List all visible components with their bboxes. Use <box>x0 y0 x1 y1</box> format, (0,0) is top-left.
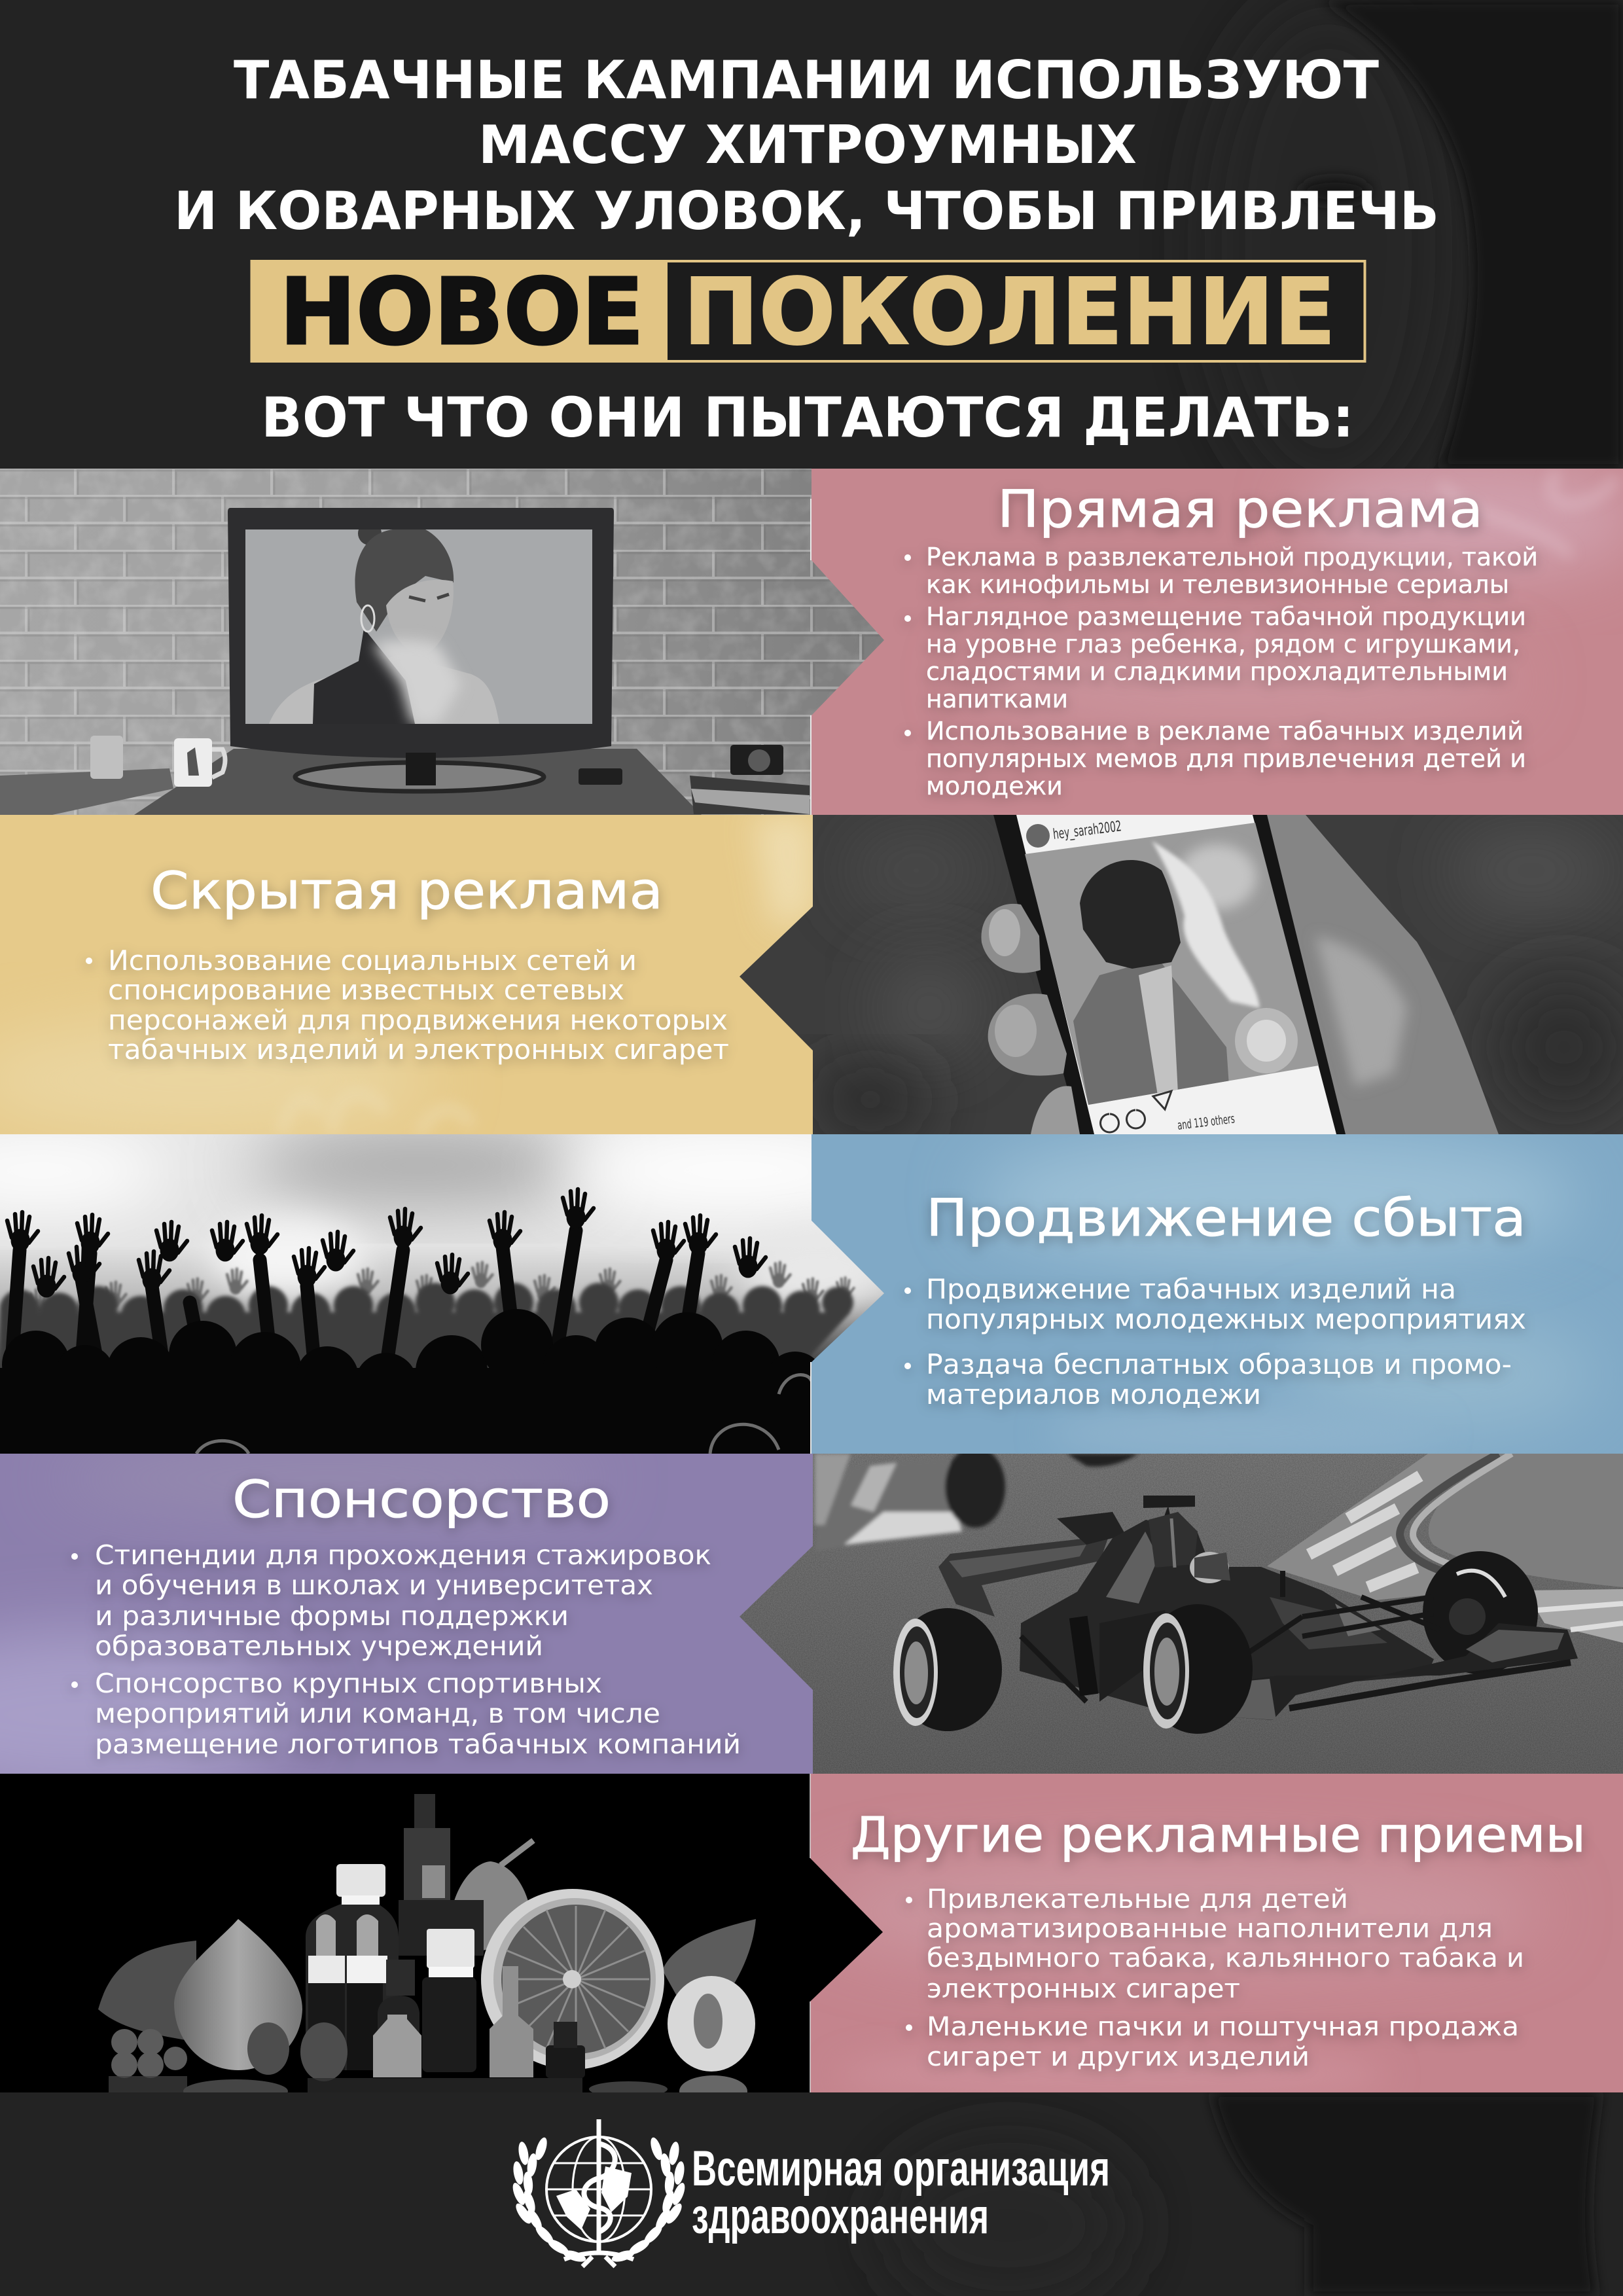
heading: Продвижение сбыта <box>926 1189 1526 1248</box>
bottles <box>306 1794 585 2078</box>
organisation name: Всемирная организация <box>692 2141 1110 2197</box>
title: МАССУ ХИТРОУМНЫХ <box>478 115 1137 175</box>
emblem <box>510 2119 687 2267</box>
grapefruit <box>481 1889 664 2070</box>
grapes <box>111 2029 187 2078</box>
bullet list: и различные формы поддержки <box>95 1600 569 1632</box>
bullet list <box>904 543 1538 800</box>
phone: and 119 others <box>1177 1111 1236 1133</box>
banner: new generation <box>251 259 1365 366</box>
bullet list: мероприятий или команд, в том числе <box>95 1698 660 1729</box>
car <box>893 1496 1578 1734</box>
phone: hey_sarah2002 <box>1052 818 1122 843</box>
bullet list: Стипендии для прохождения стажировок <box>95 1539 711 1571</box>
hand <box>1263 815 1499 1134</box>
bullet list: сигарет и других изделий <box>927 2042 1310 2072</box>
bullet list: размещение логотипов табачных компаний <box>95 1729 741 1760</box>
grass verge <box>1429 1454 1623 1587</box>
photo: fruit and e-liquid bottles <box>0 1774 890 2107</box>
bullet list: Раздача бесплатных образцов и промо- <box>926 1348 1512 1380</box>
WHO logo: здравоохранения <box>692 2189 989 2244</box>
bullet list <box>86 944 729 1066</box>
title: И КОВАРНЫХ УЛОВОК, ЧТОБЫ ПРИВЛЕЧЬ <box>174 181 1439 242</box>
phone <box>993 815 1346 1134</box>
suspension <box>1021 1571 1440 1702</box>
title: ТАБАЧНЫЕ КАМПАНИИ ИСПОЛЬЗУЮТ <box>234 50 1379 111</box>
divider highlights <box>810 1774 811 2092</box>
photo: concert crowd <box>0 1126 903 1454</box>
divider highlights <box>810 499 812 815</box>
apricot half <box>668 1976 755 2072</box>
banner: new generation: НОВОЕ <box>279 259 644 366</box>
bullet list: популярных мемов для привлечения детей и <box>926 744 1526 773</box>
heading: Спонсорство <box>232 1471 611 1530</box>
table <box>134 749 702 815</box>
post photo <box>1025 823 1319 1105</box>
woman on screen <box>269 522 499 724</box>
bullet list: на уровне глаз ребенка, рядом с игрушками, <box>926 630 1520 658</box>
kerb <box>1267 1454 1505 1600</box>
bullet list: бездымного табака, кальянного табака и <box>927 1943 1524 1973</box>
books and camera <box>690 745 810 814</box>
reflection <box>109 2075 747 2107</box>
bullet list: электронных сигарет <box>927 1974 1240 2004</box>
left books <box>0 768 173 815</box>
bullet list <box>71 1539 741 1760</box>
bullet list: и обучения в школах и университетах <box>95 1570 653 1601</box>
bullet list: Привлекательные для детей <box>927 1884 1348 1914</box>
bullet list: Маленькие пачки и поштучная продажа <box>927 2012 1519 2042</box>
far crowd with small hands <box>31 1263 854 1314</box>
peach <box>174 1919 302 2070</box>
photo: phone with social media post <box>733 815 1623 1134</box>
bullet list <box>904 1273 1526 1410</box>
photo: racing car <box>733 1446 1623 1774</box>
title <box>174 50 1439 242</box>
bullet list: ароматизированные наполнители для <box>927 1914 1493 1944</box>
bullet list: Реклама в развлекательной продукции, такой <box>926 543 1538 571</box>
divider highlights <box>810 1362 812 1454</box>
rear wing <box>938 1525 1113 1617</box>
cherries <box>247 2022 348 2081</box>
heading: Прямая реклама <box>997 480 1483 539</box>
background photo: woman's face, top <box>1304 0 1622 469</box>
candle <box>90 736 123 779</box>
subtitle: ВОТ ЧТО ОНИ ПЫТАЮТСЯ ДЕЛАТЬ: <box>261 386 1354 450</box>
panel: other advertising techniques <box>810 1774 1623 2101</box>
heading: Скрытая реклама <box>151 862 663 921</box>
bullet list: материалов молодежи <box>926 1378 1261 1410</box>
bullet list: спонсирование известных сетевых <box>108 974 624 1006</box>
bullet list: персонажей для продвижения некоторых <box>108 1004 728 1036</box>
middle row of crowd <box>0 1283 853 1454</box>
bullet list: молодежи <box>926 772 1063 800</box>
bullet list: как кинофильмы и телевизионные сериалы <box>926 570 1509 599</box>
bullet list: образовательных учреждений <box>95 1630 543 1662</box>
bullet list: Наглядное размещение табачной продукции <box>926 602 1526 631</box>
background car <box>815 1446 1139 1551</box>
TV stand <box>295 753 544 791</box>
bullet list: табачных изделий и электронных сигарет <box>108 1033 729 1066</box>
leaves <box>98 1941 196 2042</box>
bullet list: напитками <box>926 685 1068 713</box>
photo: TV on brick wall <box>0 469 890 815</box>
bullet list: Использование в рекламе табачных изделий <box>926 717 1524 745</box>
mug <box>174 738 225 787</box>
panel: sales promotion <box>810 1132 1623 1460</box>
fingers <box>981 904 1080 1134</box>
banner: new generation: ПОКОЛЕНИЕ <box>683 259 1336 366</box>
router <box>579 768 622 785</box>
heading: Другие рекламные приемы <box>851 1807 1586 1863</box>
wheels <box>893 1608 1002 1731</box>
front wing <box>1221 1623 1578 1720</box>
bullet list: популярных молодежных мероприятиях <box>926 1303 1526 1335</box>
panel: sponsorship <box>0 1446 814 1800</box>
bullet list: Использование социальных сетей и <box>108 944 637 977</box>
front row of crowd <box>0 1309 825 1454</box>
WHO logo <box>510 2119 1110 2267</box>
bullet list <box>906 1884 1524 2072</box>
bullet list: сладостями и сладкими прохладительными <box>926 657 1508 686</box>
bodywork <box>1020 1520 1434 1708</box>
background photo: woman's face, bottom <box>883 2092 1600 2296</box>
TV <box>228 508 614 758</box>
panel: hidden advertising <box>0 815 814 1139</box>
panel: direct advertising <box>810 458 1623 815</box>
bullet list: Продвижение табачных изделий на <box>926 1273 1456 1305</box>
bullet list: Спонсорство крупных спортивных <box>95 1668 602 1699</box>
pear <box>450 1861 533 1957</box>
raised arms and hands <box>7 1189 766 1368</box>
